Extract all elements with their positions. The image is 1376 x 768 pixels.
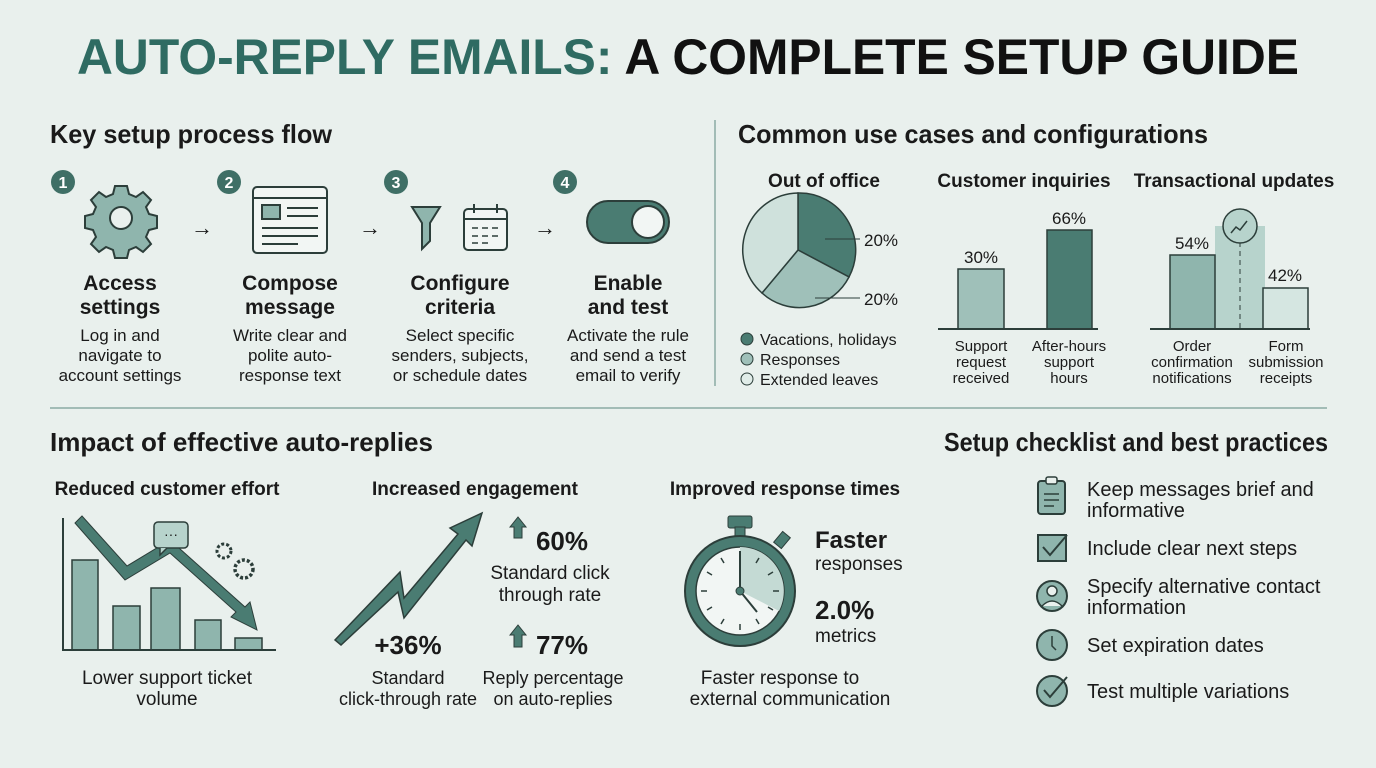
item: expiration [1037, 630, 1264, 660]
panel: customer inquiries chart [937, 171, 1111, 387]
step 2: response text [239, 366, 341, 385]
panel: improved response times: responses [815, 554, 903, 575]
panel: checklist [1037, 477, 1321, 706]
step 3: or schedule dates [393, 366, 527, 385]
panel: customer inquiries chart: request [956, 354, 1007, 371]
panel: transactional updates chart: Form [1268, 338, 1304, 355]
panel: out of office pie: Extended leaves [760, 372, 878, 389]
item: next steps: Include clear next steps [1087, 538, 1297, 560]
panel: customer inquiries chart: 66% [1052, 209, 1086, 228]
panel: out of office pie: 20% [864, 290, 898, 309]
step 1 [51, 170, 181, 385]
step 4: 4 [561, 175, 570, 192]
panel: transactional updates chart: Order [1173, 338, 1211, 355]
step 4: Enable [594, 272, 662, 295]
item: brief [1038, 477, 1314, 522]
step 1: Access [83, 272, 157, 295]
item: contact: information [1087, 597, 1186, 619]
step 4: and test [588, 296, 668, 319]
panel: customer inquiries chart: hours [1050, 370, 1088, 387]
item: expiration: Set expiration dates [1087, 635, 1264, 657]
heading: setup checklist: Setup checklist and best practices [944, 427, 1328, 457]
panel: increased engagement: 60% [536, 526, 588, 556]
panel: out of office pie: Responses [760, 352, 840, 369]
item: test: Test multiple variations [1087, 681, 1289, 703]
item: contact: Specify alternative contact [1087, 576, 1321, 598]
panel: increased engagement: on auto-replies [493, 689, 613, 709]
panel: customer inquiries chart: received [953, 370, 1009, 387]
step 1: 1 [59, 175, 68, 192]
step 3: Select specific [406, 326, 515, 345]
step 2: Compose [242, 272, 338, 295]
panel: transactional updates chart: receipts [1260, 370, 1312, 387]
panel: reduced customer effort [55, 479, 280, 710]
step 1: account settings [59, 366, 181, 385]
panel: increased engagement: through rate [499, 585, 601, 606]
panel: increased engagement: Standard click [490, 563, 610, 584]
panel: out of office pie: Vacations, holidays [760, 332, 897, 349]
panel: transactional updates chart: submission [1248, 354, 1324, 371]
item: brief: informative [1087, 500, 1185, 522]
arrow: → [359, 215, 381, 240]
panel: customer inquiries chart: Customer inquiries [937, 171, 1111, 192]
panel: reduced customer effort: Lower support ticket [82, 668, 253, 689]
panel: steps [51, 170, 689, 385]
item: contact [1037, 576, 1321, 619]
panel: out of office pie: 20% [864, 231, 898, 250]
step 3: Configure [410, 272, 510, 295]
panel: reduced customer effort: volume [136, 689, 198, 710]
panel: increased engagement: Increased engagement [372, 479, 579, 500]
panel: improved response times: external communication [690, 689, 890, 710]
step 4: email to verify [576, 366, 681, 385]
arrow: → [534, 215, 556, 240]
panel: increased engagement: Reply percentage [482, 668, 624, 688]
step 3 [384, 170, 529, 385]
step 1: navigate to [78, 346, 162, 365]
panel: customer inquiries chart: support [1044, 354, 1095, 371]
title: AUTO-REPLY EMAILS: A COMPLETE SETUP GUIDE [77, 29, 1299, 85]
step 4 [553, 170, 689, 385]
panel: transactional updates chart: Transactional updates [1134, 171, 1334, 192]
panel: reduced customer effort: Reduced customer effort [55, 479, 280, 500]
panel: out of office pie [741, 171, 898, 389]
step 1: Log in and [80, 326, 160, 345]
step 2: Write clear and [233, 326, 347, 345]
heading: key setup process flow: Key setup process flow [50, 119, 333, 149]
panel: out of office pie: Out of office [768, 171, 880, 192]
panel: improved response times: Faster [815, 527, 887, 554]
panel: increased engagement [335, 479, 624, 709]
item: brief: Keep messages brief and [1087, 479, 1314, 501]
heading: common use cases: Common use cases and configurations [738, 119, 1208, 149]
step 2: polite auto- [248, 346, 332, 365]
step 4: and send a test [570, 346, 686, 365]
panel: transactional updates chart: 42% [1268, 266, 1302, 285]
heading: impact: Impact of effective auto-replies [50, 427, 433, 457]
panel: improved response times: Faster response to [701, 668, 859, 689]
panel: transactional updates chart: notifications [1152, 370, 1232, 387]
panel: improved response times: 2.0% [815, 595, 874, 625]
step 3: criteria [425, 296, 495, 319]
panel: reduced customer effort: ··· [164, 526, 178, 542]
step 2: message [245, 296, 335, 319]
panel: improved response times [670, 479, 903, 710]
step 2: 2 [225, 175, 234, 192]
panel: transactional updates chart [1134, 171, 1334, 387]
item: test [1037, 676, 1289, 706]
panel: improved response times: Improved response times [670, 479, 900, 500]
panel: transactional updates chart: confirmation [1151, 354, 1233, 371]
panel: increased engagement: click-through rate [339, 689, 477, 709]
panel: transactional updates chart: 54% [1175, 234, 1209, 253]
panel: increased engagement: Standard [371, 668, 445, 688]
panel: customer inquiries chart: After-hours [1032, 338, 1106, 355]
item: next steps [1038, 535, 1297, 561]
step 2 [217, 170, 347, 385]
step 3: senders, subjects, [391, 346, 529, 365]
step 3: 3 [392, 175, 401, 192]
panel: increased engagement: 77% [536, 630, 588, 660]
panel: customer inquiries chart: 30% [964, 248, 998, 267]
step 1: settings [80, 296, 160, 319]
panel: improved response times: metrics [815, 626, 876, 647]
panel: customer inquiries chart: Support [955, 338, 1008, 355]
arrow: → [191, 215, 213, 240]
panel: increased engagement: +36% [374, 630, 442, 660]
step 4: Activate the rule [567, 326, 689, 345]
